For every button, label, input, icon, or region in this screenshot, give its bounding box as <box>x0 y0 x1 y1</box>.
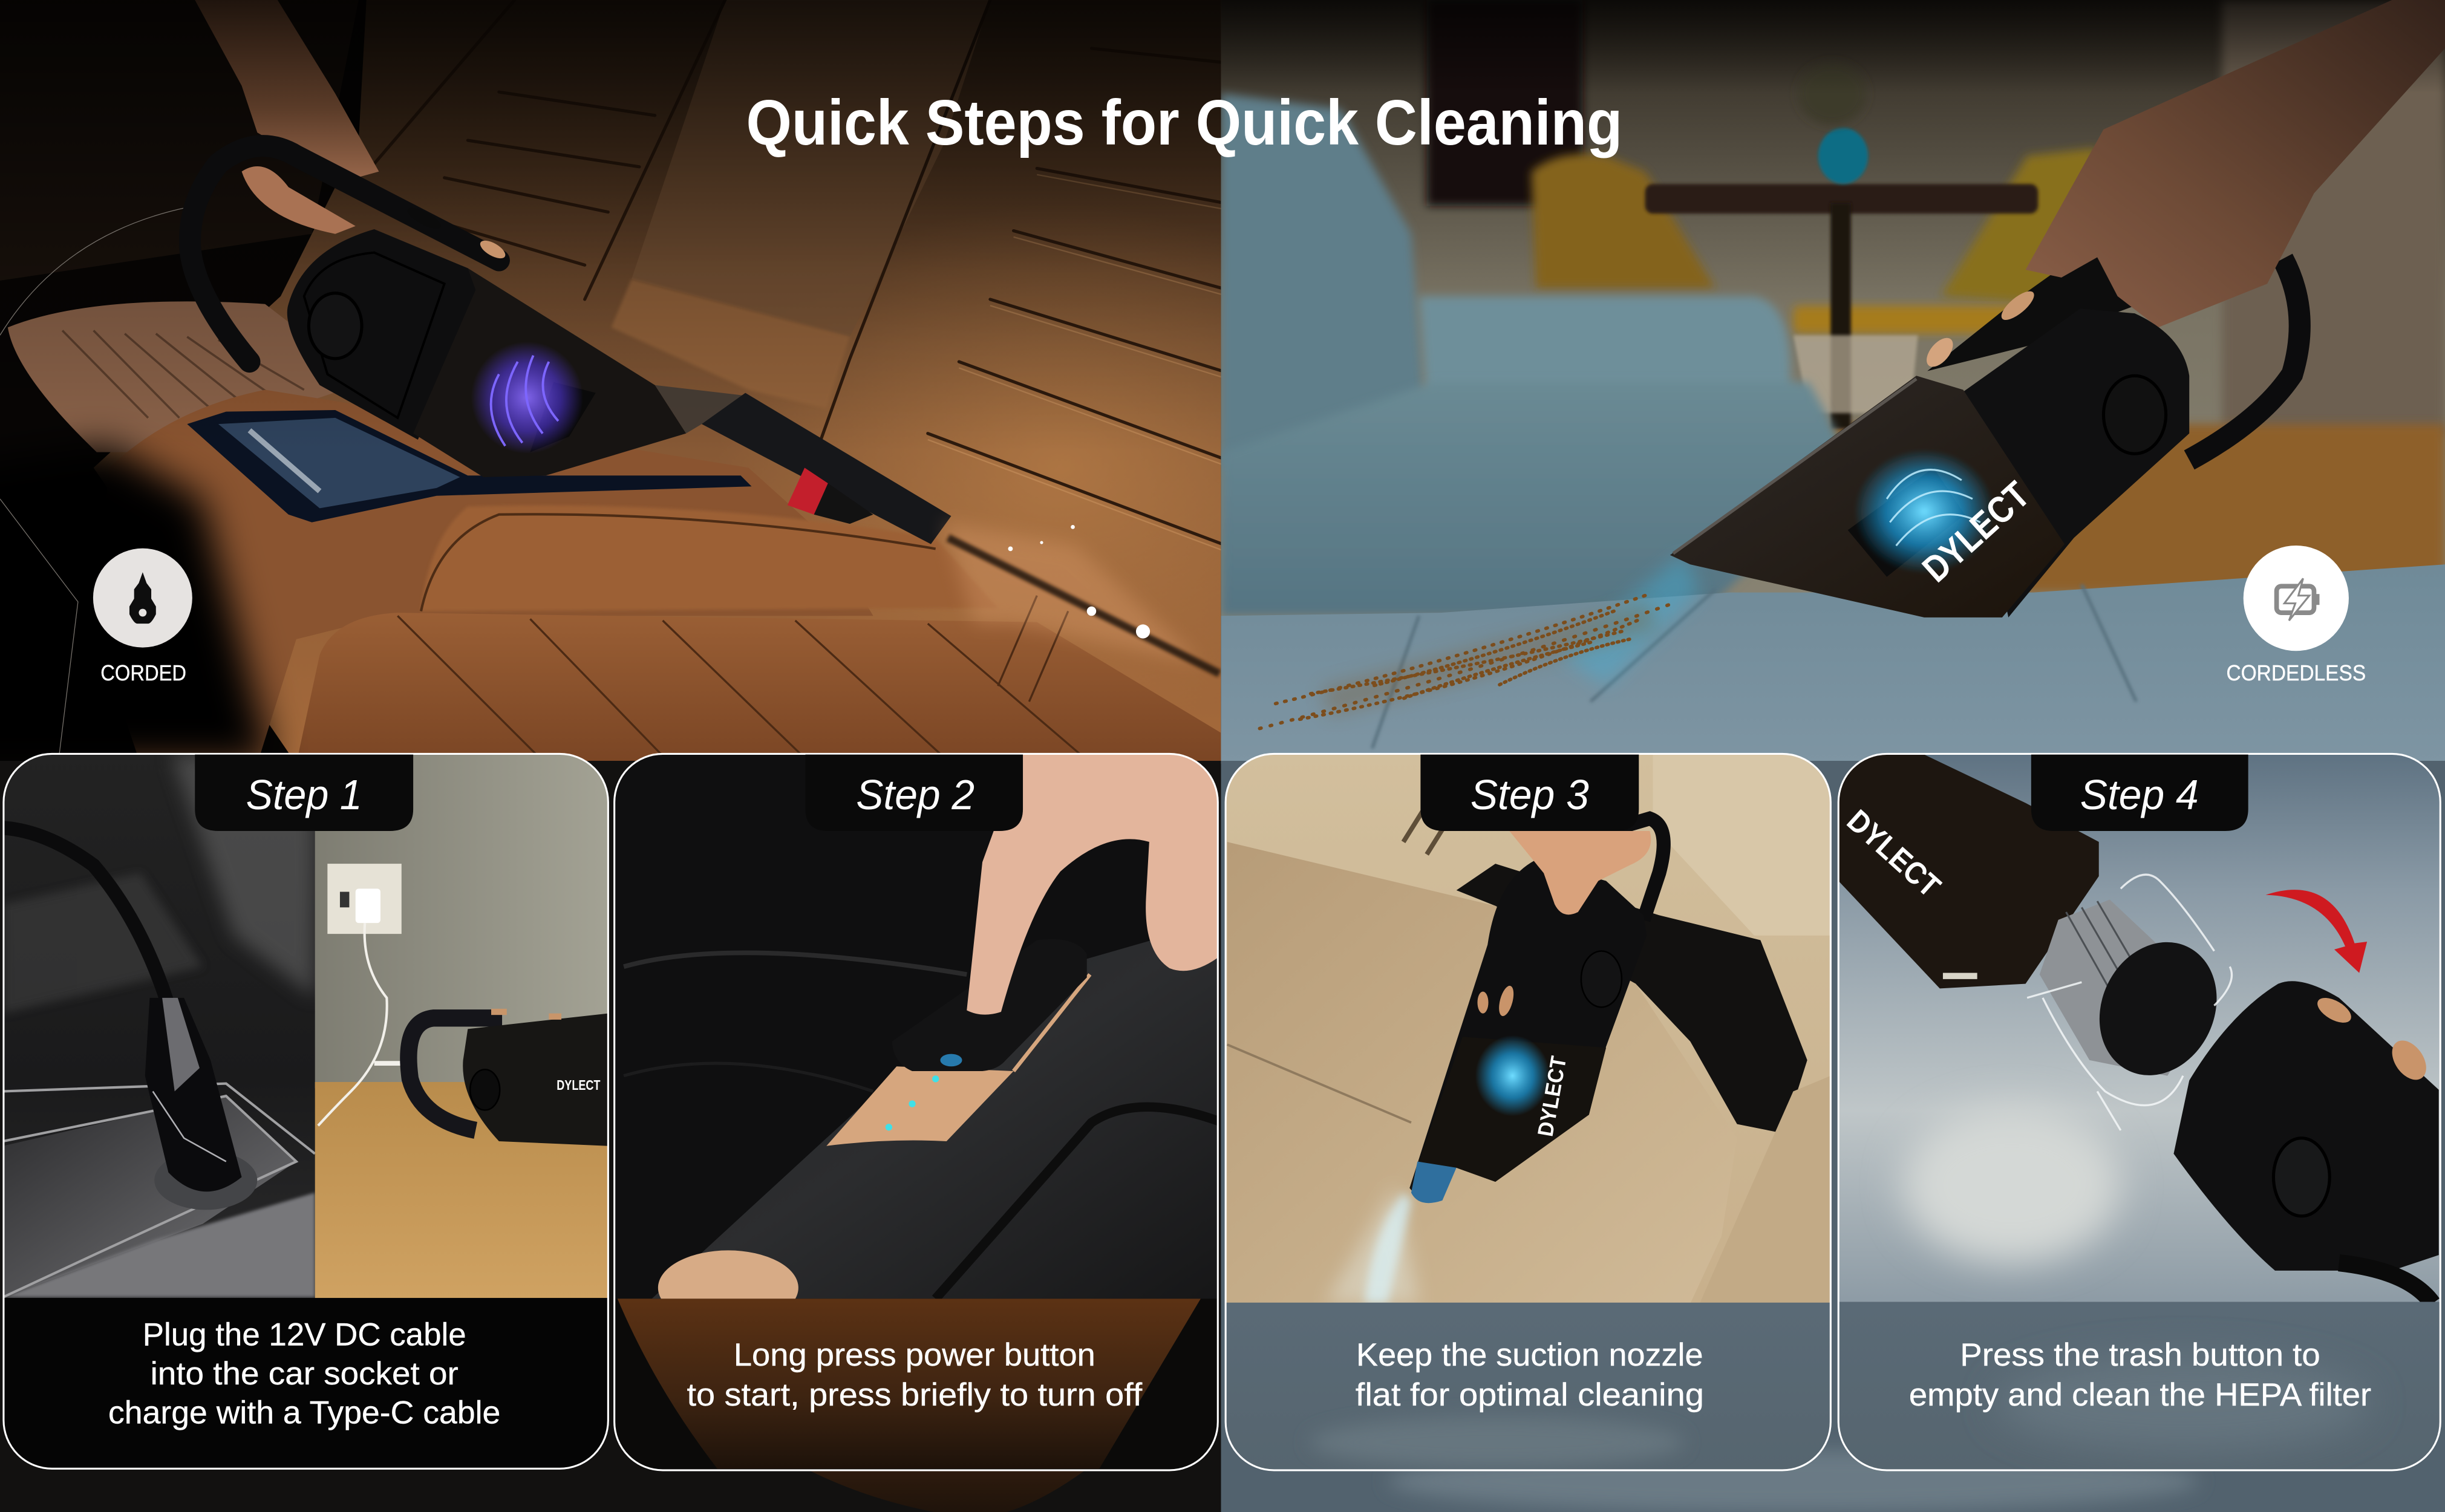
centre seat back panel <box>633 0 988 287</box>
logo: DYLECT <box>1915 474 2038 590</box>
panel: step 1 <box>3 753 608 1470</box>
vacuum body <box>652 920 1222 1299</box>
HEPA filter <box>2040 899 2214 1076</box>
blue console tray <box>187 410 752 523</box>
brown dust trail <box>1325 616 1653 702</box>
wall socket <box>327 864 402 934</box>
handle stub <box>2339 1263 2432 1303</box>
dark window shelf <box>1427 0 1582 206</box>
card outline <box>615 754 1218 1470</box>
logo: DYLECT <box>1841 803 1948 904</box>
small vacuum <box>408 1018 502 1130</box>
hand and arm <box>195 0 379 179</box>
step 2 caption: to start, press briefly to turn off <box>687 1377 1143 1413</box>
red nozzle part <box>788 468 828 515</box>
detached dust bin <box>1838 755 2099 988</box>
step 2 caption <box>687 1337 1143 1413</box>
step 1 caption: charge with a Type-C cable <box>108 1395 500 1431</box>
sofa back <box>1221 94 1427 468</box>
step 2 caption: Long press power button <box>734 1337 1095 1373</box>
hand <box>2026 0 2445 327</box>
step 1 caption background <box>3 1298 608 1470</box>
filter cap <box>2078 923 2238 1095</box>
car console photo <box>3 753 315 1299</box>
step 2 image and caption <box>615 753 1222 1470</box>
round button <box>1581 951 1622 1007</box>
dark car interior <box>615 753 1218 1299</box>
panel: step 3 <box>1226 753 1830 1471</box>
step 3 caption: flat for optimal cleaning <box>1356 1377 1704 1413</box>
beige car interior <box>1226 753 1830 1303</box>
step 1 tab <box>195 755 413 831</box>
wall photo <box>315 753 608 1088</box>
step 1 caption <box>108 1317 500 1431</box>
dust bin section <box>1409 1037 1606 1198</box>
light streak <box>1365 1193 1411 1303</box>
vacuum rear body <box>287 229 483 440</box>
blue nozzle tip <box>1411 1161 1457 1203</box>
transparent dust bin <box>413 268 686 477</box>
lower background <box>1221 761 2445 1512</box>
sofa arm <box>1419 296 1801 413</box>
tray floor <box>3 1095 296 1297</box>
spray at nozzle tip <box>944 523 1201 663</box>
copper buttons <box>2313 993 2355 1028</box>
title: Quick Steps for Quick Cleaning <box>746 87 1622 158</box>
step 3 image and caption <box>1226 753 1830 1471</box>
step 3 caption background <box>1226 1303 1830 1471</box>
red arrow <box>2266 890 2367 973</box>
brown glow under caption <box>615 1294 1201 1512</box>
copper panel <box>826 1066 1014 1146</box>
plant <box>1798 62 1867 125</box>
copper buttons <box>405 204 443 233</box>
side armrest cushion <box>8 301 367 452</box>
step 1 image and caption: DYLECT <box>557 1077 600 1093</box>
handle loop <box>2189 259 2300 460</box>
card outline <box>1838 754 2440 1470</box>
step 1 caption: into the car socket or <box>151 1356 459 1392</box>
step 4 label: Step 4 <box>2080 771 2199 818</box>
step 2 label: Step 2 <box>856 771 974 818</box>
hand on handle <box>1509 831 1651 914</box>
badge: cordless <box>2226 546 2366 685</box>
panel: step 4 <box>1838 753 2440 1470</box>
purple motor glow <box>471 342 583 454</box>
step 2 caption background <box>615 1299 1218 1470</box>
icon: battery bolt <box>2244 546 2349 651</box>
table <box>1645 184 2038 213</box>
indicator dots <box>886 1075 939 1130</box>
right wall <box>2222 0 2445 437</box>
icon: car plug <box>93 549 192 648</box>
power button circle <box>308 293 362 359</box>
seat seams <box>374 0 1222 544</box>
teal vase <box>1818 128 1868 184</box>
console leather <box>94 389 873 764</box>
seat cushion <box>1227 842 1737 1303</box>
motor shaft <box>1848 468 1965 577</box>
step 1 label: Step 1 <box>246 771 362 818</box>
car door interior <box>0 101 322 281</box>
white cable <box>318 923 387 1126</box>
illustration: hand holding corded vacuum <box>190 0 1219 674</box>
lower seat cushion <box>296 613 1221 764</box>
step 3 tab <box>1420 755 1639 831</box>
sofa seat <box>1221 382 1856 616</box>
dark motor <box>530 382 596 452</box>
illustration: hand holding cordless vacuum <box>1670 0 2445 618</box>
copper button circle <box>658 1250 798 1325</box>
card outline <box>1226 754 1830 1470</box>
blue motor glow <box>1854 449 1994 574</box>
copper buttons <box>1997 287 2039 325</box>
step 3 caption: Keep the suction nozzle <box>1356 1337 1703 1373</box>
logo: DYLECT <box>1533 1054 1571 1138</box>
step 4 image and caption <box>1838 753 2440 1470</box>
lower background <box>0 761 1221 1512</box>
step 1 image and caption <box>3 753 608 1470</box>
step 4 caption: Press the trash button to <box>1960 1337 2320 1373</box>
top bar <box>1927 234 2140 371</box>
step 3 label: Step 3 <box>1471 771 1589 818</box>
copper buttons <box>1497 984 1516 1018</box>
step 4 caption background <box>1838 1302 2440 1470</box>
step 1 caption: Plug the 12V DC cable <box>143 1317 466 1353</box>
blue motor glow <box>1475 1035 1550 1116</box>
wooden floor <box>1824 424 2445 593</box>
long nozzle <box>702 393 951 544</box>
silver console rim <box>3 1084 315 1297</box>
vertical vacuum <box>1409 861 1647 1198</box>
blurred background <box>1838 753 2440 1303</box>
round button <box>2103 376 2166 454</box>
transparent bin <box>1670 376 2065 618</box>
rear body <box>1962 308 2189 618</box>
yellow chairs <box>1531 154 1715 288</box>
card outline <box>4 754 608 1468</box>
thin cable <box>0 207 187 755</box>
blue spray <box>1559 553 1700 686</box>
corded label: CORDED <box>100 660 186 685</box>
vacuum handle loop <box>190 146 499 362</box>
fingers <box>967 755 1222 1015</box>
badge: corded <box>93 549 192 685</box>
step 3 caption <box>1356 1337 1704 1413</box>
step 2 tab <box>805 755 1023 831</box>
vacuum rear body <box>2173 981 2439 1271</box>
round button <box>2273 1138 2329 1216</box>
dark fade on left <box>68 420 295 753</box>
foreground cushion <box>1221 564 2445 764</box>
panel: corded car seat scene <box>0 0 1221 1512</box>
cordedless label: CORDEDLESS <box>2226 660 2366 685</box>
power button <box>892 939 1087 1071</box>
water splash <box>2027 875 2231 1130</box>
handle loop <box>1544 818 1663 920</box>
panel: step 2 <box>615 753 1222 1470</box>
step 4 tab <box>2031 755 2248 831</box>
floor mat <box>1457 864 1807 1133</box>
step 4 caption: empty and clean the HEPA filter <box>1909 1377 2371 1413</box>
panel: cordless sofa scene <box>1221 0 2445 1512</box>
step 4 caption <box>1909 1337 2371 1413</box>
seat back leather <box>94 0 1221 764</box>
cigarette lighter charger <box>3 828 167 1001</box>
wooden table <box>315 1082 608 1299</box>
